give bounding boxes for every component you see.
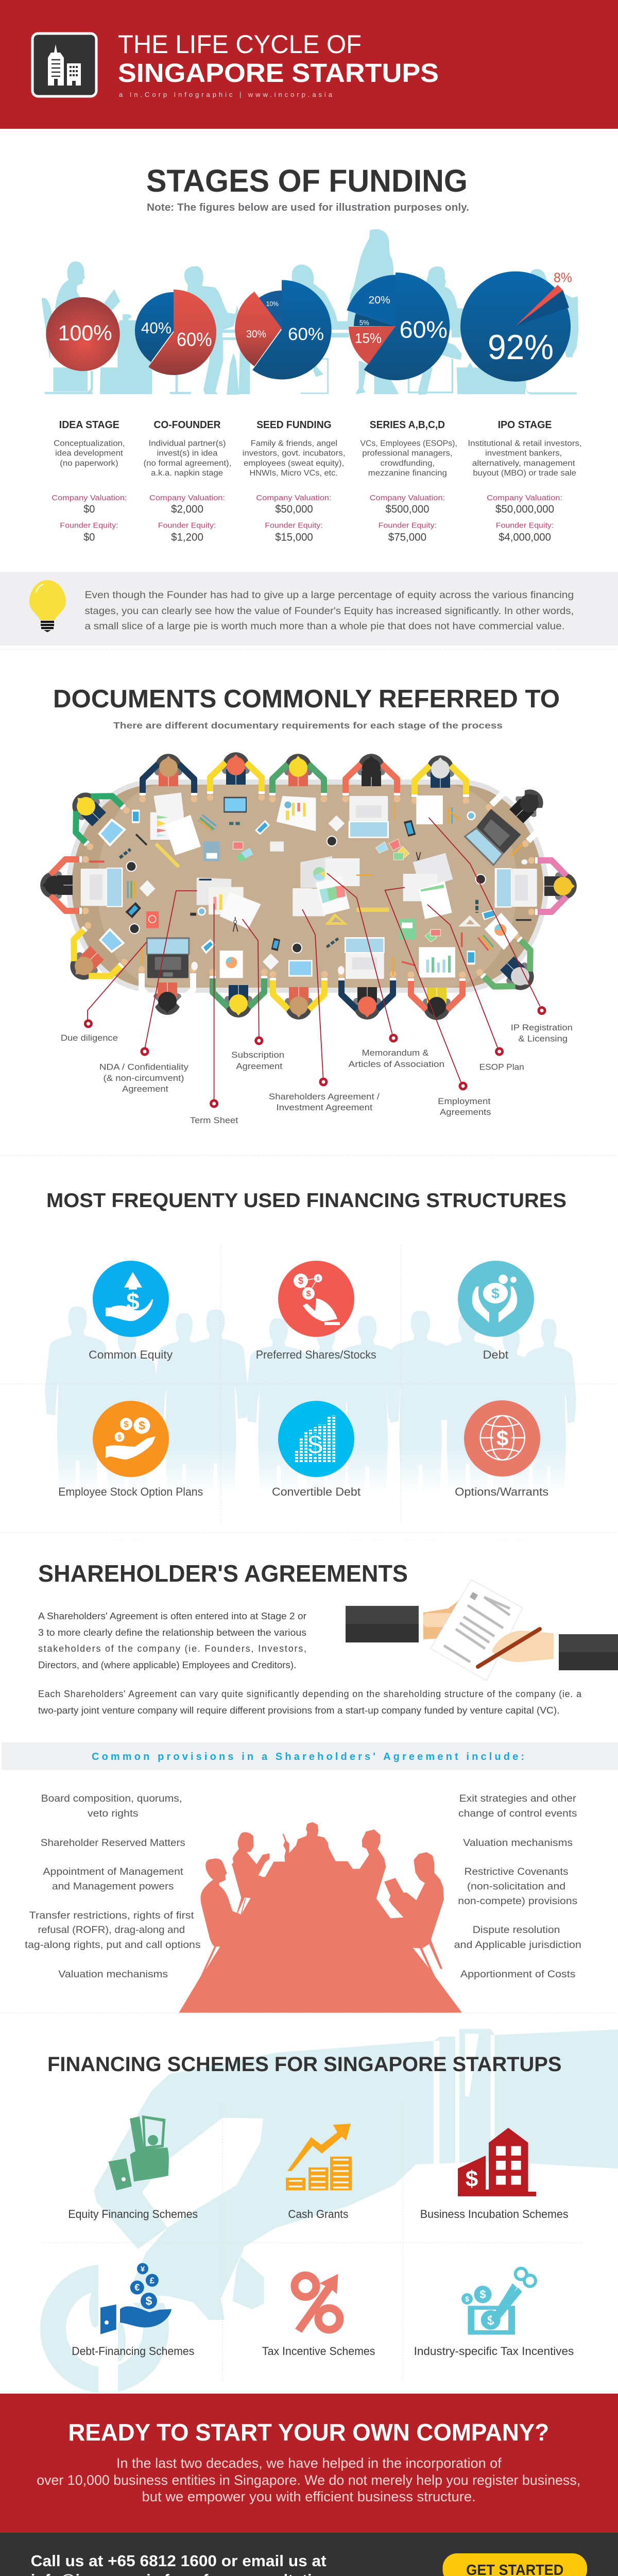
icon: hand with dollar and arrow <box>93 1261 169 1337</box>
callout: ip registration <box>429 818 573 1044</box>
stage column: co-founder: Individual partner(s) <box>148 439 226 448</box>
list: provisions right: Dispute resolution <box>473 1925 560 1936</box>
icon: scissors cutting bill: $ <box>465 2295 469 2303</box>
list: provisions left: tag-along rights, put and call options <box>25 1940 201 1951</box>
stage column: ipo stage: Founder Equity: <box>496 521 554 530</box>
heading: shareholder's agreements: SHAREHOLDER'S AGREEMENTS <box>38 1560 408 1587</box>
scheme: cash grants: Cash Grants <box>288 2208 348 2221</box>
stage column: series a,b,c,d: Company Valuation: <box>370 494 445 502</box>
stage column: idea stage: Conceptualization, <box>54 439 125 448</box>
stage column: ipo stage: alternatively, management <box>472 459 575 468</box>
stage column: idea stage: Company Valuation: <box>52 494 127 502</box>
pie chart: series a,b,c,d <box>347 273 450 380</box>
scheme: tax incentive: Tax Incentive Schemes <box>262 2345 375 2358</box>
icon: hand picking coins: $ <box>306 1290 311 1298</box>
icon: percent with arrow <box>295 2274 340 2333</box>
structure: common equity <box>89 1261 173 1361</box>
callout: esop plan <box>427 905 524 1072</box>
text block: intro <box>38 1611 306 1670</box>
callout: nda agreement: (& non-circumvent) <box>103 1073 184 1083</box>
call to action panel <box>0 2394 618 2533</box>
scheme: debt financing <box>72 2263 194 2358</box>
subheading: There are different documentary requirements for each stage of the process <box>113 720 503 731</box>
stage column: idea stage <box>52 419 127 543</box>
pie chart: co-founder: 60% <box>177 329 212 350</box>
callout: employment agreements: Employment <box>438 1096 491 1106</box>
callout: due diligence <box>61 942 147 1043</box>
stage column: series a,b,c,d: Founder Equity: <box>379 521 437 530</box>
list: provisions left: Valuation mechanisms <box>58 1969 168 1980</box>
icon: hand picking coins: $ <box>298 1276 303 1286</box>
heading: financing schemes: FINANCING SCHEMES FOR SINGAPORE STARTUPS <box>47 2053 561 2076</box>
scheme: equity financing <box>68 2115 198 2221</box>
band: common provisions heading: Common provisions in a Shareholders' Agreement include: <box>92 1751 524 1762</box>
icon: building with dollar <box>458 2128 536 2196</box>
cta text: but we empower you with efficient business structure. <box>142 2489 476 2504</box>
list: provisions left: Shareholder Reserved Matters <box>41 1838 185 1849</box>
stage column: seed funding: HNWIs, Micro VCs, etc. <box>249 469 338 478</box>
table items: left half <box>81 792 316 978</box>
icon: globe with dollar <box>464 1400 540 1477</box>
callout: esop plan: ESOP Plan <box>479 1062 524 1072</box>
icon: rising bar grid with dollar <box>278 1401 354 1477</box>
scheme: industry-specific tax incentives: Industry-specific Tax Incentives <box>414 2345 574 2358</box>
title: SINGAPORE STARTUPS <box>118 58 439 88</box>
list: provisions right: Valuation mechanisms <box>463 1838 573 1849</box>
icon: open hand with coins: $ <box>117 1433 122 1441</box>
icon: hand with currency coins: ¥ <box>141 2265 145 2274</box>
stage column: co-founder: $1,200 <box>171 532 203 543</box>
list: provisions left: Board composition, quorums, <box>41 1793 182 1804</box>
scheme: tax incentive <box>262 2274 375 2358</box>
text block: intro: stakeholders of the company (ie. Founders, Investors, <box>38 1643 306 1654</box>
stage column: series a,b,c,d: SERIES A,B,C,D <box>370 419 445 431</box>
pie chart: ipo stage <box>460 270 572 382</box>
text block: intro: 3 to more clearly define the relationship between the various <box>38 1628 306 1638</box>
pie chart: ipo stage: 92% <box>488 328 554 367</box>
pie chart: idea stage: 100% <box>58 321 112 345</box>
heading: most frequently used financing structures: MOST FREQUENTY USED FINANCING STRUCTURES <box>46 1190 566 1212</box>
scheme: debt financing: Debt-Financing Schemes <box>72 2345 194 2358</box>
callout: nda agreement <box>99 891 197 1094</box>
pie chart: seed funding <box>235 280 332 379</box>
stage column: ipo stage <box>468 419 582 543</box>
background: hand holding coin <box>53 2029 618 2394</box>
stage column: co-founder <box>144 419 231 543</box>
structure: preferred shares: Preferred Shares/Stocks <box>256 1348 376 1361</box>
pie chart: seed funding: 30% <box>246 329 266 340</box>
pie chart: series a,b,c,d: 15% <box>355 331 382 346</box>
header banner <box>0 0 618 129</box>
structure: common equity: Common Equity <box>89 1348 173 1361</box>
pie chart: co-founder: 40% <box>141 319 171 337</box>
stage column: series a,b,c,d: $75,000 <box>388 532 426 543</box>
note: Note: The figures below are used for illustration purposes only. <box>147 202 469 213</box>
pie chart: series a,b,c,d: 20% <box>369 295 390 306</box>
stage column: idea stage: $0 <box>83 532 95 543</box>
stage column: series a,b,c,d: $500,000 <box>385 503 430 515</box>
stage column: ipo stage: Company Valuation: <box>487 494 562 502</box>
title <box>118 30 439 88</box>
stage column: co-founder: CO-FOUNDER <box>153 419 221 431</box>
structure: debt: Debt <box>483 1348 508 1361</box>
callout: nda agreement: Agreement <box>122 1084 168 1094</box>
heading: stages of funding: STAGES OF FUNDING <box>146 163 468 198</box>
stage column: seed funding: employees (sweat equity), <box>244 459 344 468</box>
list: provisions left: veto rights <box>88 1808 139 1819</box>
callout: term sheet <box>190 904 238 1125</box>
silhouette: board meeting <box>179 1822 462 2013</box>
pie chart: ipo stage: 8% <box>554 270 572 285</box>
stage column: ipo stage: buyout (MBO) or trade sale <box>473 469 576 478</box>
background: crowd silhouettes <box>31 1307 587 1540</box>
structure: debt <box>458 1261 534 1361</box>
title: THE LIFE CYCLE OF <box>118 30 362 59</box>
list: provisions right: and Applicable jurisdiction <box>454 1940 581 1951</box>
list: provisions right: (non-solicitation and <box>467 1882 565 1892</box>
cta text <box>37 2455 580 2504</box>
stage column: series a,b,c,d: professional managers, <box>362 449 453 458</box>
scheme: business incubation: Business Incubation Schemes <box>420 2208 569 2221</box>
stage column: seed funding: SEED FUNDING <box>256 419 332 431</box>
icon: hand picking coins: $ <box>317 1276 320 1282</box>
cta text: over 10,000 business entities in Singapore. We do not merely help you register business, <box>37 2472 580 2488</box>
stage column: seed funding: $50,000 <box>275 503 313 515</box>
icon: hands holding coin: $ <box>491 1285 500 1301</box>
band: common provisions heading <box>2 1742 618 1770</box>
list: provisions right: non-compete) provisions <box>458 1896 577 1907</box>
list: provisions left: and Management powers <box>52 1882 174 1892</box>
stage column: idea stage: IDEA STAGE <box>59 419 119 431</box>
list: provisions left: Transfer restrictions, rights of first <box>29 1910 194 1921</box>
icon: hands holding coin <box>458 1261 534 1337</box>
icon: hand with currency coins <box>100 2263 171 2334</box>
list: provisions left: refusal (ROFR), drag-along and <box>38 1925 185 1936</box>
icon: city buildings logo <box>32 33 96 96</box>
list: provisions right: change of control events <box>458 1808 577 1819</box>
stage column: series a,b,c,d: crowdfunding, <box>380 459 435 468</box>
callout: nda agreement: NDA / Confidentiality <box>99 1062 188 1072</box>
stage column: ipo stage: IPO STAGE <box>498 419 552 431</box>
stage column: co-founder: (no formal agreement), <box>144 459 231 468</box>
pie chart: series a,b,c,d: 60% <box>400 316 448 343</box>
stage column: co-founder: a.k.a. napkin stage <box>151 469 223 478</box>
callout: ip registration: IP Registration <box>511 1023 573 1032</box>
table items: right half <box>300 795 537 979</box>
list: provisions left <box>25 1793 201 1980</box>
stage column: seed funding: $15,000 <box>275 532 313 543</box>
scheme: equity financing: Equity Financing Schemes <box>68 2208 198 2221</box>
cta heading: READY TO START YOUR OWN COMPANY? <box>68 2419 549 2446</box>
callout band: founder equity insight <box>0 572 618 646</box>
stage column: idea stage: Founder Equity: <box>60 521 118 530</box>
icon: scissors cutting bill: $ <box>479 2288 486 2301</box>
text block: variation <box>38 1689 582 1716</box>
icon: open hand with coins: $ <box>139 1419 145 1432</box>
pie chart: seed funding: 10% <box>266 300 279 308</box>
callout: memorandum and articles: Memorandum & <box>362 1048 429 1058</box>
icon: hand with currency coins: € <box>134 2282 140 2293</box>
text block: stages, you can clearly see how the value of Founder's Equity has increased significantly. In other words, <box>84 606 574 617</box>
text block: Even though the Founder has had to give up a large percentage of equity across the various financing <box>84 590 574 601</box>
callout: shareholders agreement: Investment Agreement <box>276 1103 373 1112</box>
callout: due diligence: Due diligence <box>61 1033 118 1043</box>
list: provisions right <box>454 1793 581 1980</box>
stage column: series a,b,c,d <box>360 419 457 543</box>
callout: memorandum and articles <box>327 873 444 1069</box>
callout: shareholders agreement: Shareholders Agreement / <box>269 1092 380 1101</box>
stage column: series a,b,c,d: VCs, Employees (ESOPs), <box>360 439 457 448</box>
icon: open hand with coins <box>93 1401 169 1477</box>
scheme: industry-specific tax incentives <box>414 2268 574 2358</box>
stage column: ipo stage: Institutional & retail investors, <box>468 439 582 448</box>
scheme: business incubation <box>420 2128 569 2221</box>
callout: employment agreements <box>385 887 491 1117</box>
text block: variation: Each Shareholders' Agreement can vary quite significantly depending on the shareholding structure of the company (ie. a <box>38 1689 582 1699</box>
structure: preferred shares <box>256 1261 376 1361</box>
stage column: ipo stage: $50,000,000 <box>495 503 554 515</box>
stage column: seed funding: Company Valuation: <box>256 494 332 502</box>
stage column: seed funding: investors, govt. incubators, <box>243 449 345 458</box>
structure: convertible debt: Convertible Debt <box>272 1485 360 1498</box>
stage column: seed funding <box>243 419 345 543</box>
icon: rising arrow with coin stacks <box>286 2124 352 2191</box>
icon: hand picking coins <box>278 1261 354 1337</box>
structure: employee stock option plans: Employee Stock Option Plans <box>58 1485 203 1498</box>
heading: documents commonly referred to: DOCUMENTS COMMONLY REFERRED TO <box>53 685 560 713</box>
contact text: Call us at +65 6812 1600 or email us at <box>31 2552 327 2570</box>
icon: hand with currency coins: $ <box>146 2294 152 2308</box>
list: provisions left: Appointment of Management <box>43 1867 184 1877</box>
callout: subscription agreement <box>231 919 284 1071</box>
list: provisions right: Apportionment of Costs <box>460 1969 575 1980</box>
people around the table <box>40 752 577 1020</box>
chart background: seated people silhouettes <box>42 229 578 395</box>
scheme: cash grants <box>286 2124 352 2221</box>
stage column: ipo stage: investment bankers, <box>485 449 562 458</box>
callout: employment agreements: Agreements <box>440 1107 491 1117</box>
structure: options and warrants <box>455 1400 548 1498</box>
pie chart: idea stage <box>46 297 120 371</box>
structure: employee stock option plans <box>58 1401 203 1498</box>
callout: subscription agreement: Subscription <box>231 1050 284 1060</box>
icon: scissors cutting bill <box>461 2268 536 2335</box>
stage column: co-founder: invest(s) in idea <box>157 449 218 458</box>
illustration: signing a document <box>346 1580 618 1681</box>
pie chart: co-founder <box>135 290 216 375</box>
list: provisions right: Exit strategies and other <box>459 1793 577 1804</box>
tagline: a In.Corp Infographic | www.incorp.asia <box>119 91 333 98</box>
stage column: seed funding: Founder Equity: <box>265 521 323 530</box>
stage column: idea stage: (no paperwork) <box>60 459 118 468</box>
icon: globe with dollar: $ <box>496 1426 508 1450</box>
stage column: series a,b,c,d: mezzanine financing <box>368 469 447 478</box>
stage column: idea stage: idea development <box>55 449 123 458</box>
pie chart: series a,b,c,d: 5% <box>359 318 369 327</box>
button: get started <box>443 2553 587 2576</box>
pie chart: seed funding: 60% <box>288 325 324 344</box>
icon: scissors cutting bill: $ <box>487 2313 494 2328</box>
text block: a small slice of a large pie is worth much more than a whole pie that does not have commercial value. <box>84 621 564 632</box>
icon: rising bar grid with dollar: $ <box>307 1429 323 1460</box>
list: provisions right: Restrictive Covenants <box>465 1867 569 1877</box>
structure: options and warrants: Options/Warrants <box>455 1485 548 1498</box>
stage column: co-founder: Founder Equity: <box>158 521 216 530</box>
stage column: ipo stage: $4,000,000 <box>499 532 551 543</box>
illustration: meeting table seen from above <box>40 752 577 1020</box>
text block: intro: Directors, and (where applicable) Employees and Creditors). <box>38 1660 296 1670</box>
icon: open hand with coins: $ <box>124 1419 129 1429</box>
stage column: co-founder: $2,000 <box>171 503 203 515</box>
callout: shareholders agreement <box>269 909 380 1112</box>
callout: subscription agreement: Agreement <box>236 1061 283 1071</box>
table top <box>66 779 548 993</box>
cta text: In the last two decades, we have helped in the incorporation of <box>116 2455 502 2471</box>
contact bar <box>0 2533 618 2576</box>
callout: ip registration: & Licensing <box>518 1033 568 1044</box>
stage column: idea stage: $0 <box>83 503 95 515</box>
text block: variation: two-party joint venture company will require different provisions from a start-up company funded by venture capital (VC). <box>38 1705 559 1716</box>
icon: hand with dollar and arrow: $ <box>126 1288 140 1315</box>
structure: convertible debt <box>272 1401 360 1498</box>
stage column: co-founder: Company Valuation: <box>149 494 225 502</box>
callout: term sheet: Term Sheet <box>190 1115 238 1125</box>
text block: intro: A Shareholders' Agreement is often entered into at Stage 2 or <box>38 1611 306 1621</box>
icon: hand holding bills <box>108 2115 169 2191</box>
stage column: seed funding: Family & friends, angel <box>251 439 337 448</box>
icon: building with dollar: $ <box>466 2166 478 2192</box>
icon: light bulb <box>29 580 66 632</box>
icon: hand with currency coins: £ <box>150 2276 155 2285</box>
text block <box>84 590 574 632</box>
callout: memorandum and articles: Articles of Association <box>348 1059 444 1069</box>
